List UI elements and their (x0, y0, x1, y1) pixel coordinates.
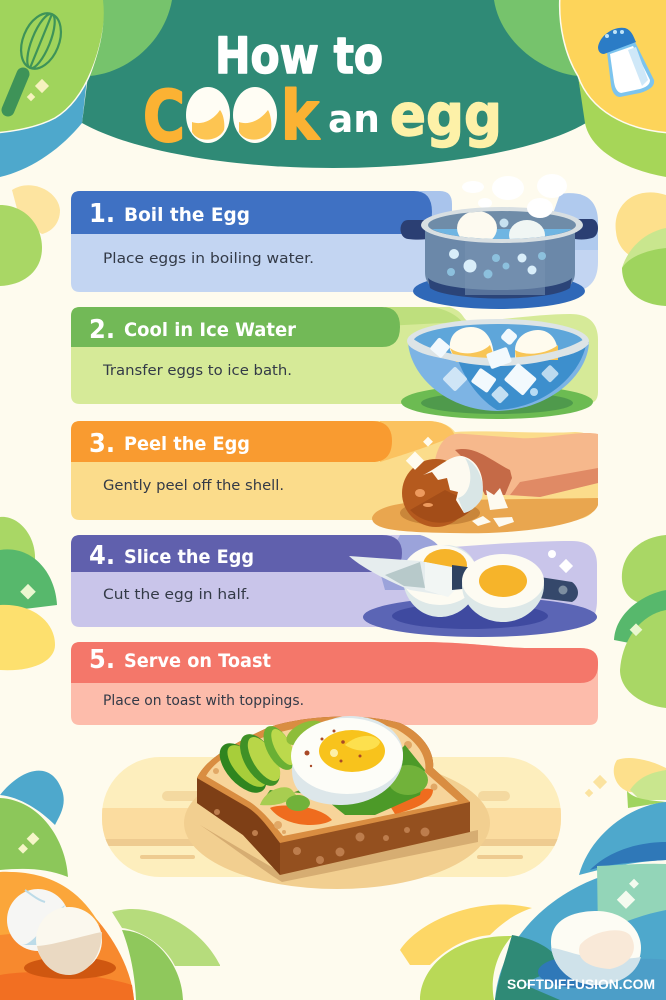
step 1 text: Place eggs in boiling water. (103, 251, 314, 267)
icon: hand peeling egg (372, 433, 598, 533)
step 4 heading: 4. (89, 541, 115, 571)
icon: ice bowl (401, 319, 593, 419)
watermark: SOFTDIFFUSION.COM (507, 976, 655, 992)
wooden board under toast (102, 757, 561, 889)
panel: step 5 serve (71, 642, 598, 725)
title (143, 27, 502, 158)
title: an (328, 97, 380, 141)
step 5 heading (89, 645, 271, 675)
illustration: toast with avocado and egg (197, 715, 478, 882)
step 3 heading (89, 429, 250, 459)
title: egg (390, 81, 502, 149)
step 1 heading: 1. (89, 199, 115, 229)
panel: step 3 peel (71, 421, 598, 520)
step 3 heading: Peel the Egg (124, 433, 250, 455)
step 2 text: Transfer eggs to ice bath. (102, 363, 292, 379)
step 5 heading: 5. (89, 645, 115, 675)
title: How to (215, 27, 383, 85)
step 2 heading: Cool in Ice Water (124, 319, 297, 341)
icon: salt shaker (598, 28, 654, 97)
icon: knife and sliced egg (349, 545, 597, 637)
step 1 heading (89, 199, 250, 229)
icon: whisk (8, 7, 69, 110)
panel: step 2 cool (71, 307, 598, 404)
icon: boiling pot (400, 174, 598, 309)
title: k (281, 77, 320, 156)
step 2 heading (89, 315, 297, 345)
side decoration right lower (614, 535, 666, 708)
step 3 heading: 3. (89, 429, 115, 459)
step 2 heading: 2. (89, 315, 115, 345)
step 1 heading: Boil the Egg (124, 204, 250, 226)
side decoration left upper (0, 185, 60, 286)
step 5 heading: Serve on Toast (124, 650, 271, 672)
side decoration left lower (0, 517, 57, 670)
panel: step 1 boil (71, 191, 598, 292)
decoration bottom left (0, 771, 220, 1000)
decoration bottom right (400, 758, 666, 1000)
step 4 text: Cut the egg in half. (103, 587, 250, 603)
title: C (143, 76, 185, 158)
panel: step 4 slice (71, 535, 597, 627)
step 4 heading: Slice the Egg (124, 546, 254, 568)
side decoration right upper (616, 192, 666, 306)
step 3 text: Gently peel off the shell. (103, 478, 284, 494)
step 4 heading (89, 541, 254, 571)
header decoration (0, 0, 666, 177)
step 5 text: Place on toast with toppings. (103, 693, 304, 709)
